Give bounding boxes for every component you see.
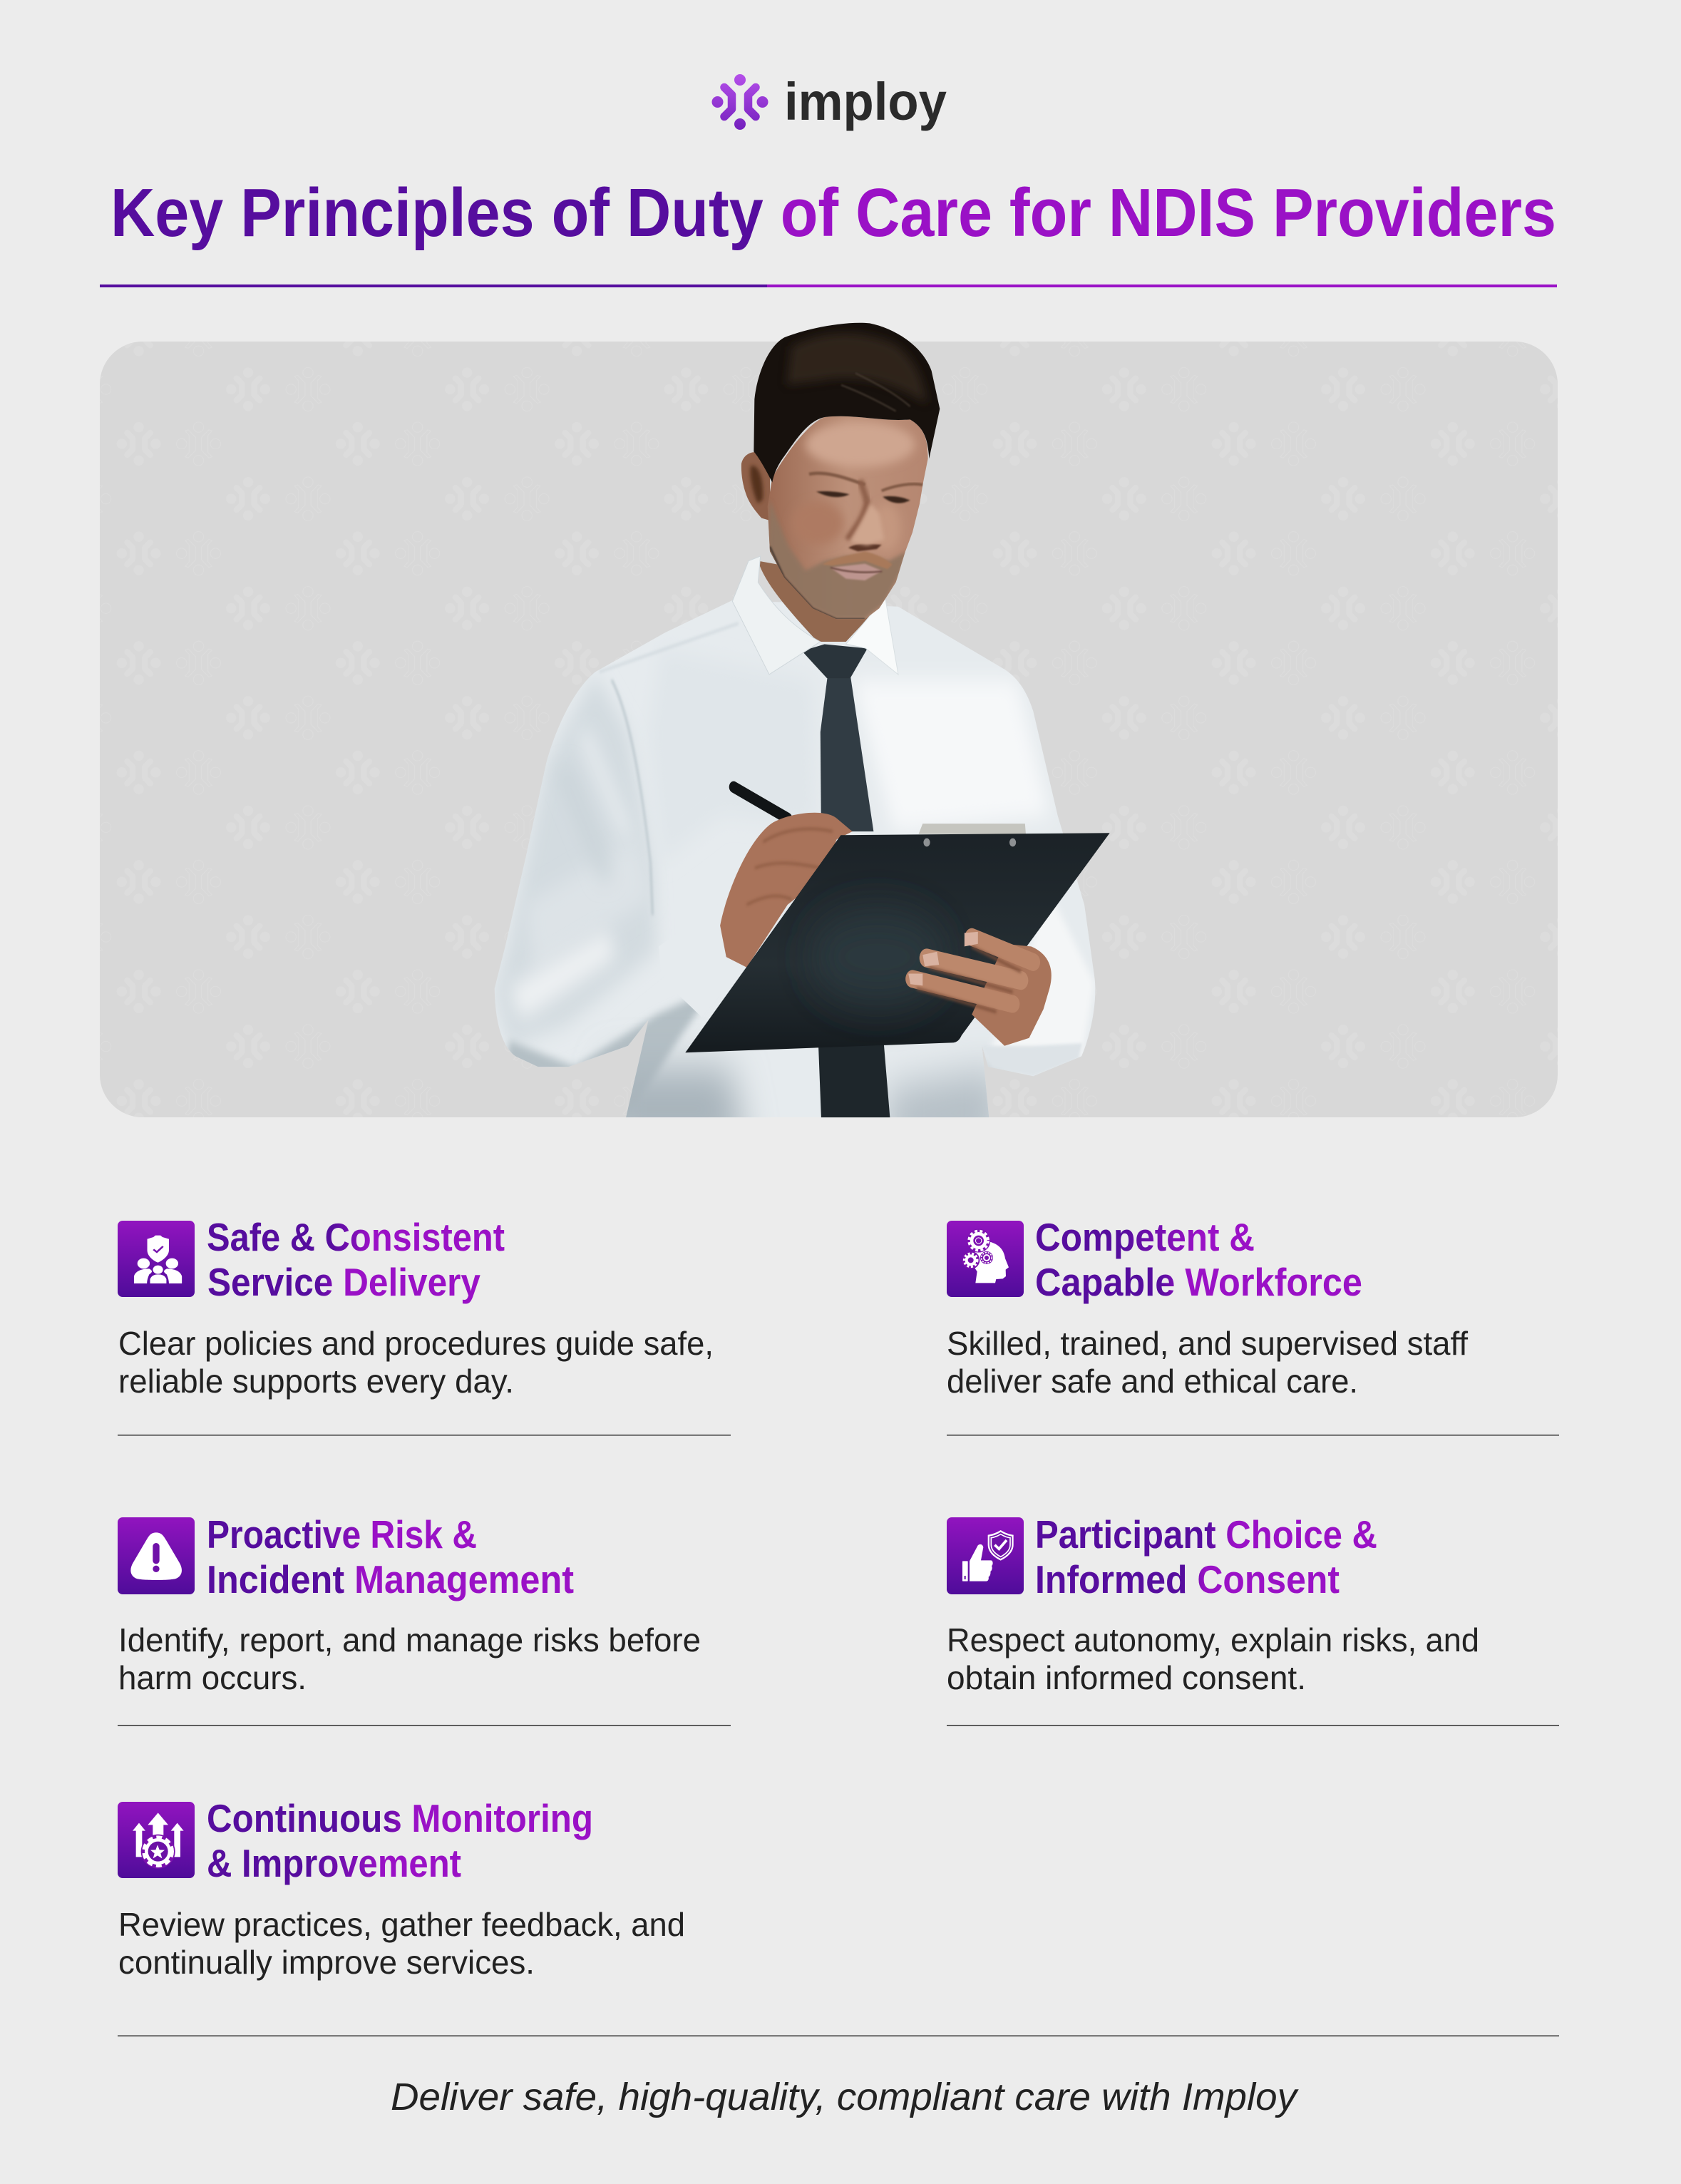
card heading: Informed Consent bbox=[1035, 1557, 1340, 1601]
tie lower bbox=[818, 1043, 890, 1117]
card description: harm occurs. bbox=[118, 1659, 307, 1696]
card description: Identify, report, and manage risks before bbox=[118, 1621, 701, 1658]
sleeve cuff bbox=[683, 988, 713, 1015]
card heading: Proactive Risk & bbox=[207, 1512, 477, 1557]
hair bbox=[754, 323, 940, 483]
collar bbox=[732, 556, 898, 675]
card description: continually improve services. bbox=[118, 1944, 535, 1981]
card description: Respect autonomy, explain risks, and bbox=[947, 1621, 1479, 1658]
card: Competent & Capable Workforce bbox=[947, 1215, 1468, 1400]
title underline bbox=[100, 284, 1557, 287]
illustration: man writing on clipboard bbox=[495, 323, 1110, 1150]
card heading: Continuous Monitoring bbox=[207, 1796, 593, 1840]
card heading bbox=[1035, 1512, 1377, 1601]
icon: imploy mark bbox=[711, 74, 768, 130]
card heading: Competent & bbox=[1035, 1215, 1255, 1259]
holding hand bbox=[908, 932, 1052, 1046]
card: Proactive Risk & Incident Management bbox=[118, 1512, 701, 1696]
pen bbox=[734, 787, 788, 819]
card heading bbox=[207, 1512, 574, 1601]
card heading: Safe & Consistent bbox=[207, 1215, 505, 1259]
icon: shield and people bbox=[118, 1221, 195, 1297]
card description: obtain informed consent. bbox=[947, 1659, 1306, 1696]
tie upper bbox=[802, 645, 873, 831]
card description bbox=[947, 1325, 1468, 1400]
title: Key Principles of Duty of Care for NDIS Providers bbox=[110, 175, 1556, 251]
logo wordmark: imploy bbox=[784, 72, 947, 131]
card: Safe & Consistent Service Delivery bbox=[118, 1215, 714, 1400]
card description bbox=[947, 1621, 1479, 1696]
card description: Clear policies and procedures guide safe, bbox=[118, 1325, 714, 1362]
card heading bbox=[207, 1215, 505, 1304]
icon: arrows and gear bbox=[118, 1802, 195, 1878]
card heading: Incident Management bbox=[207, 1557, 574, 1601]
ear bbox=[741, 452, 770, 521]
card heading: Capable Workforce bbox=[1035, 1260, 1362, 1304]
card description: Review practices, gather feedback, and bbox=[118, 1906, 685, 1943]
card: Participant Choice & Informed Consent bbox=[947, 1512, 1479, 1696]
clipboard clip bbox=[919, 824, 1026, 834]
card description: Skilled, trained, and supervised staff bbox=[947, 1325, 1468, 1362]
card heading bbox=[1035, 1215, 1362, 1304]
panel: hero image background bbox=[100, 342, 1558, 1117]
clipboard bbox=[685, 833, 1110, 1052]
card heading: Service Delivery bbox=[207, 1260, 480, 1304]
card description bbox=[118, 1325, 714, 1400]
icon: thumbs up and shield bbox=[947, 1517, 1024, 1594]
card heading bbox=[207, 1796, 593, 1885]
card description bbox=[118, 1906, 685, 1981]
icon: head with gears bbox=[947, 1221, 1024, 1297]
shirt bbox=[495, 600, 1095, 1150]
card heading: Participant Choice & bbox=[1035, 1512, 1377, 1557]
icon: warning triangle bbox=[118, 1517, 195, 1594]
writing hand bbox=[720, 813, 853, 968]
card description: deliver safe and ethical care. bbox=[947, 1363, 1358, 1400]
neck bbox=[758, 561, 884, 642]
card description bbox=[118, 1621, 701, 1696]
logo: imploy bbox=[711, 72, 947, 131]
face bbox=[768, 416, 928, 619]
card: Continuous Monitoring & Improvement bbox=[118, 1796, 685, 1981]
card description: reliable supports every day. bbox=[118, 1363, 514, 1400]
footer tagline: Deliver safe, high-quality, compliant care with Imploy bbox=[391, 2076, 1299, 2118]
card heading: & Improvement bbox=[207, 1841, 461, 1885]
head bbox=[732, 323, 940, 675]
